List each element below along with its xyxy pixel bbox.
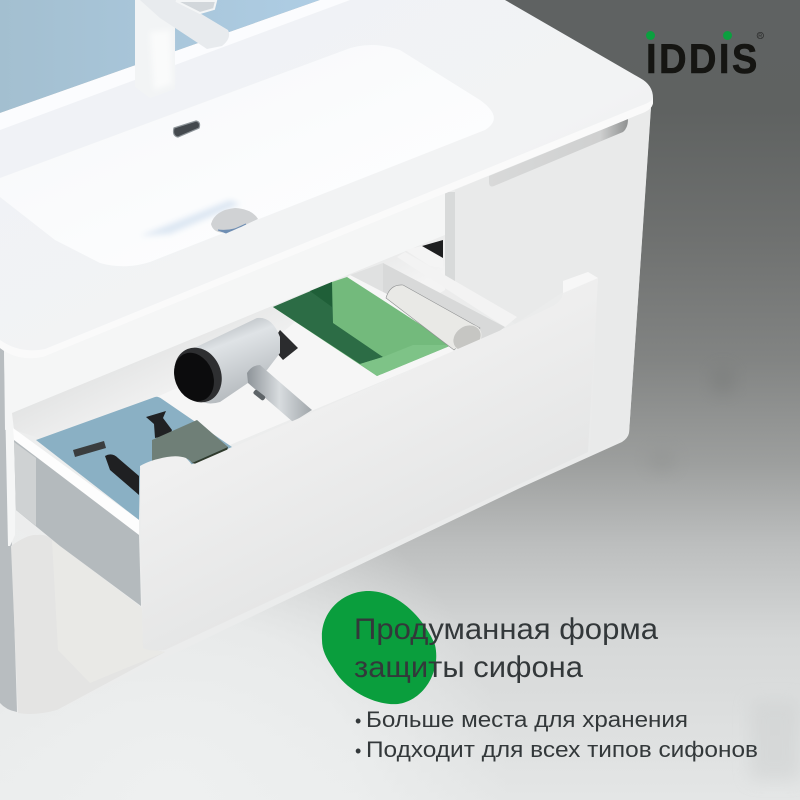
drawer floor	[150, 275, 505, 470]
bullet list: •	[355, 711, 361, 731]
bullet list	[355, 707, 758, 762]
bullet list: Больше места для хранения	[366, 707, 688, 732]
drawer front panel	[140, 272, 598, 651]
hair dryer	[166, 318, 312, 422]
cabinet body	[0, 105, 651, 714]
countertop with basin	[0, 0, 653, 358]
razor	[73, 441, 139, 495]
counter front lip	[0, 98, 653, 358]
faucet	[135, 0, 229, 98]
interior back wall	[12, 235, 445, 470]
blue illuminated wall	[0, 0, 320, 113]
heading	[354, 613, 658, 684]
drawer left side: top strip	[13, 428, 139, 535]
IDDIS logo: IDDIS	[646, 37, 757, 82]
drawer left side: grey panel	[14, 440, 141, 606]
fascia under the counter	[4, 185, 445, 430]
heading: Продуманная форма	[354, 613, 658, 646]
towel roll	[386, 285, 486, 356]
left side column	[0, 345, 17, 712]
basin	[0, 45, 494, 266]
right door with handle recess	[445, 108, 651, 455]
basin soft blue reflection	[140, 200, 240, 236]
drawer interior	[12, 235, 517, 606]
glass dispenser	[146, 411, 228, 465]
heading: защиты сифона	[354, 651, 583, 684]
drain plug	[211, 208, 258, 233]
overflow	[174, 121, 200, 137]
back ledge highlight	[0, 0, 350, 130]
green blob	[322, 591, 436, 704]
back panel by the roll	[350, 263, 383, 292]
right drawer rail	[397, 252, 517, 327]
right drawer wall	[383, 263, 505, 342]
dark gap and runner	[422, 240, 443, 262]
bullet list: •	[355, 741, 361, 761]
blue towel	[36, 397, 232, 520]
bullet list: Подходит для всех типов сифонов	[366, 737, 758, 762]
IDDIS logo: R	[758, 34, 762, 40]
green tray	[273, 277, 452, 376]
vanity cabinet	[0, 105, 651, 714]
lower drawer front	[11, 535, 165, 714]
